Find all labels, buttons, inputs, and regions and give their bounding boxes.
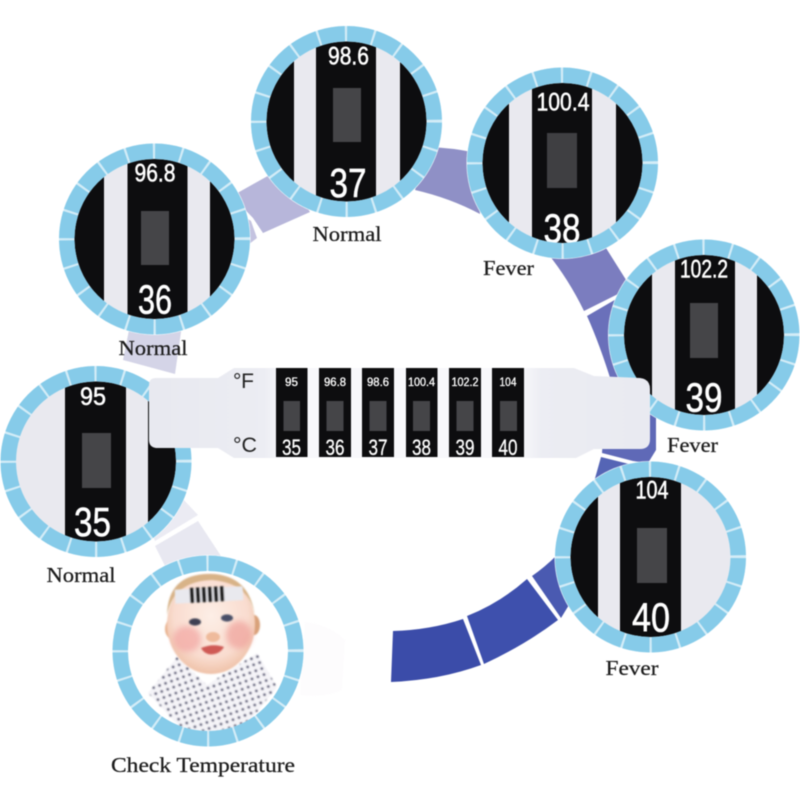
baby: forehead strip (175, 585, 243, 604)
cell: 102.2 / 39 (449, 368, 481, 460)
baby: mouth (201, 645, 224, 654)
baby: right ear (253, 614, 262, 636)
baby: head (167, 574, 255, 674)
cell: 95 / 35: 35 (282, 435, 301, 460)
circle: 38 (466, 67, 658, 259)
arc segment: 36 to 37 (232, 168, 310, 233)
cell: 104 / 40 (492, 368, 524, 460)
label: Fahrenheit: °F (233, 370, 254, 393)
arc segment: end (391, 619, 481, 682)
circle: 36: 36 (138, 276, 172, 322)
label: Celsius: °C (233, 434, 257, 457)
arc segment: above 40 (594, 457, 633, 495)
cell: 100.4 / 38 (406, 368, 438, 460)
baby: left ear (164, 621, 170, 638)
circle: 37: 98.6 (328, 42, 369, 70)
circle: baby photo (112, 555, 304, 747)
cell: 100.4 / 38: 38 (412, 435, 431, 460)
baby: hair (167, 574, 255, 617)
label: Fever 39: Fever (667, 433, 718, 457)
cell: 98.6 / 37: 37 (368, 435, 388, 460)
cell: 102.2 / 39: 102.2 (452, 377, 478, 389)
circle: 38: 38 (544, 206, 580, 252)
circle: 38: 100.4 (536, 88, 590, 116)
circle: 37 (250, 26, 442, 218)
arc segment: below 40 (532, 555, 572, 618)
cell: 95 / 35: 95 (285, 377, 298, 389)
cell: 104 / 40: 104 (500, 377, 517, 389)
thermometer strip (149, 368, 650, 460)
circle: 39: 39 (686, 374, 722, 420)
circle: 36: 96.8 (134, 160, 176, 188)
baby: bib (148, 653, 277, 735)
circle: 35: 35 (74, 499, 111, 545)
label: Check Temperature: Check Temperature (111, 753, 295, 777)
circle: 35 (0, 366, 192, 558)
arc segment: 35 to 36 (123, 325, 182, 374)
baby: left cheek (173, 626, 201, 652)
cell: 104 / 40: 40 (498, 435, 518, 460)
circle: 40: 40 (632, 594, 670, 640)
arc segment: check to 35 (155, 521, 221, 566)
baby: left eye (189, 618, 201, 626)
strip body (149, 368, 650, 458)
circle: 35: 95 (80, 383, 106, 411)
cell: 98.6 / 37 (362, 368, 394, 460)
arc segment: 37 to 38 (415, 147, 480, 214)
arc segment: 39 lower (602, 405, 656, 463)
arc: temperature band (123, 147, 656, 696)
cell: 96.8 / 36: 36 (326, 435, 344, 460)
label: Fever 38: Fever (483, 256, 534, 280)
cell: 96.8 / 36: 96.8 (324, 377, 346, 389)
circle: 39: 102.2 (680, 256, 728, 284)
circle: 40 (554, 461, 746, 653)
cell: 96.8 / 36 (319, 368, 351, 460)
cell: 98.6 / 37: 98.6 (367, 377, 389, 389)
baby: nose (206, 632, 220, 642)
arc segment: 39 side (587, 298, 645, 384)
cell: 100.4 / 38: 100.4 (408, 377, 436, 389)
baby: right eye (221, 614, 233, 622)
arc segment: 35 upper (150, 499, 198, 541)
cell: 95 / 35 (276, 368, 308, 460)
arc segment: faint tail (300, 622, 345, 696)
baby: right cheek (226, 621, 252, 649)
arc segment: 36 left piece (238, 212, 257, 248)
circle: 39 (608, 239, 800, 431)
circle: 40: 104 (636, 476, 669, 504)
cell: 102.2 / 39: 39 (456, 435, 474, 460)
circle: 36 (58, 143, 250, 335)
label: Normal 37: Normal (312, 222, 382, 246)
arc segment: lower middle (467, 579, 558, 664)
circle: 37: 37 (330, 160, 366, 206)
arc segment: 38 to 39 (545, 248, 628, 311)
label: Normal 35: Normal (46, 563, 116, 587)
label: Fever 40: Fever (606, 656, 658, 680)
label: Normal 36: Normal (118, 336, 188, 360)
